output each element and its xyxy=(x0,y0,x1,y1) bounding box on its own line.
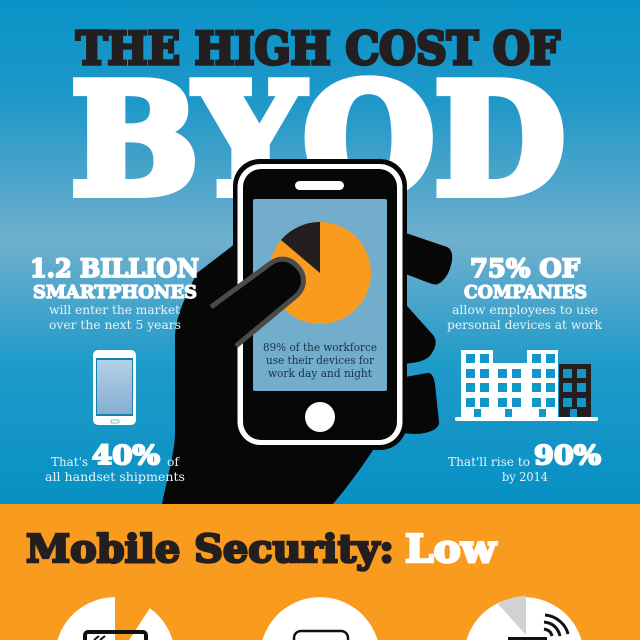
phone screen caption: work day and night xyxy=(268,366,372,380)
phone body xyxy=(233,159,407,450)
phone screen caption xyxy=(263,340,377,380)
pie icon: tablet xyxy=(58,592,172,640)
phone screen caption: 89% of the workforce xyxy=(263,340,377,354)
background: blue sky panel xyxy=(0,0,640,504)
pie icon: wireless device xyxy=(466,596,582,640)
subheading: smartphones: SMARTPHONES xyxy=(33,282,197,303)
text: by 2014: by 2014 xyxy=(502,470,548,484)
text: allow employees to use: allow employees to use xyxy=(452,303,598,317)
title: BYOD: BYOD xyxy=(71,50,565,229)
subheading: companies: COMPANIES xyxy=(464,282,587,303)
text: of: of xyxy=(167,455,181,469)
text: will enter the market: will enter the market xyxy=(49,303,180,317)
panel: right companies statistic xyxy=(447,254,603,484)
heading: 1.2 billion: 1.2 BILLION xyxy=(30,254,199,283)
panel: mobile security xyxy=(0,504,640,640)
thumb xyxy=(190,258,303,360)
phone screen caption: use their devices for xyxy=(266,353,374,367)
phone screen xyxy=(253,199,387,391)
stat: 40%: 40% xyxy=(92,441,160,471)
text: over the next 5 years: over the next 5 years xyxy=(49,318,181,332)
pie chart: 89 percent xyxy=(269,222,371,324)
panel: left smartphone statistic xyxy=(30,254,199,484)
title line: the high cost of: THE HIGH COST OF xyxy=(76,23,560,75)
hand palm and fingers xyxy=(162,231,452,504)
text: personal devices at work: personal devices at work xyxy=(447,318,603,332)
heading: mobile security: Mobile Security: xyxy=(26,526,394,571)
text: all handset shipments: all handset shipments xyxy=(45,470,185,484)
icon: smartphone xyxy=(93,350,136,425)
pie icon: smartphone xyxy=(262,597,378,640)
stat: 90%: 90% xyxy=(534,441,601,471)
illustration: hand holding phone xyxy=(162,159,452,504)
phone speaker xyxy=(295,181,344,190)
phone home button xyxy=(305,402,335,432)
heading: 75% of: 75% OF xyxy=(470,254,580,283)
text: that's: That's xyxy=(51,455,88,469)
text: that'll rise to: That'll rise to xyxy=(448,455,530,469)
icon: office buildings xyxy=(455,350,598,421)
heading: low: Low xyxy=(405,526,497,571)
